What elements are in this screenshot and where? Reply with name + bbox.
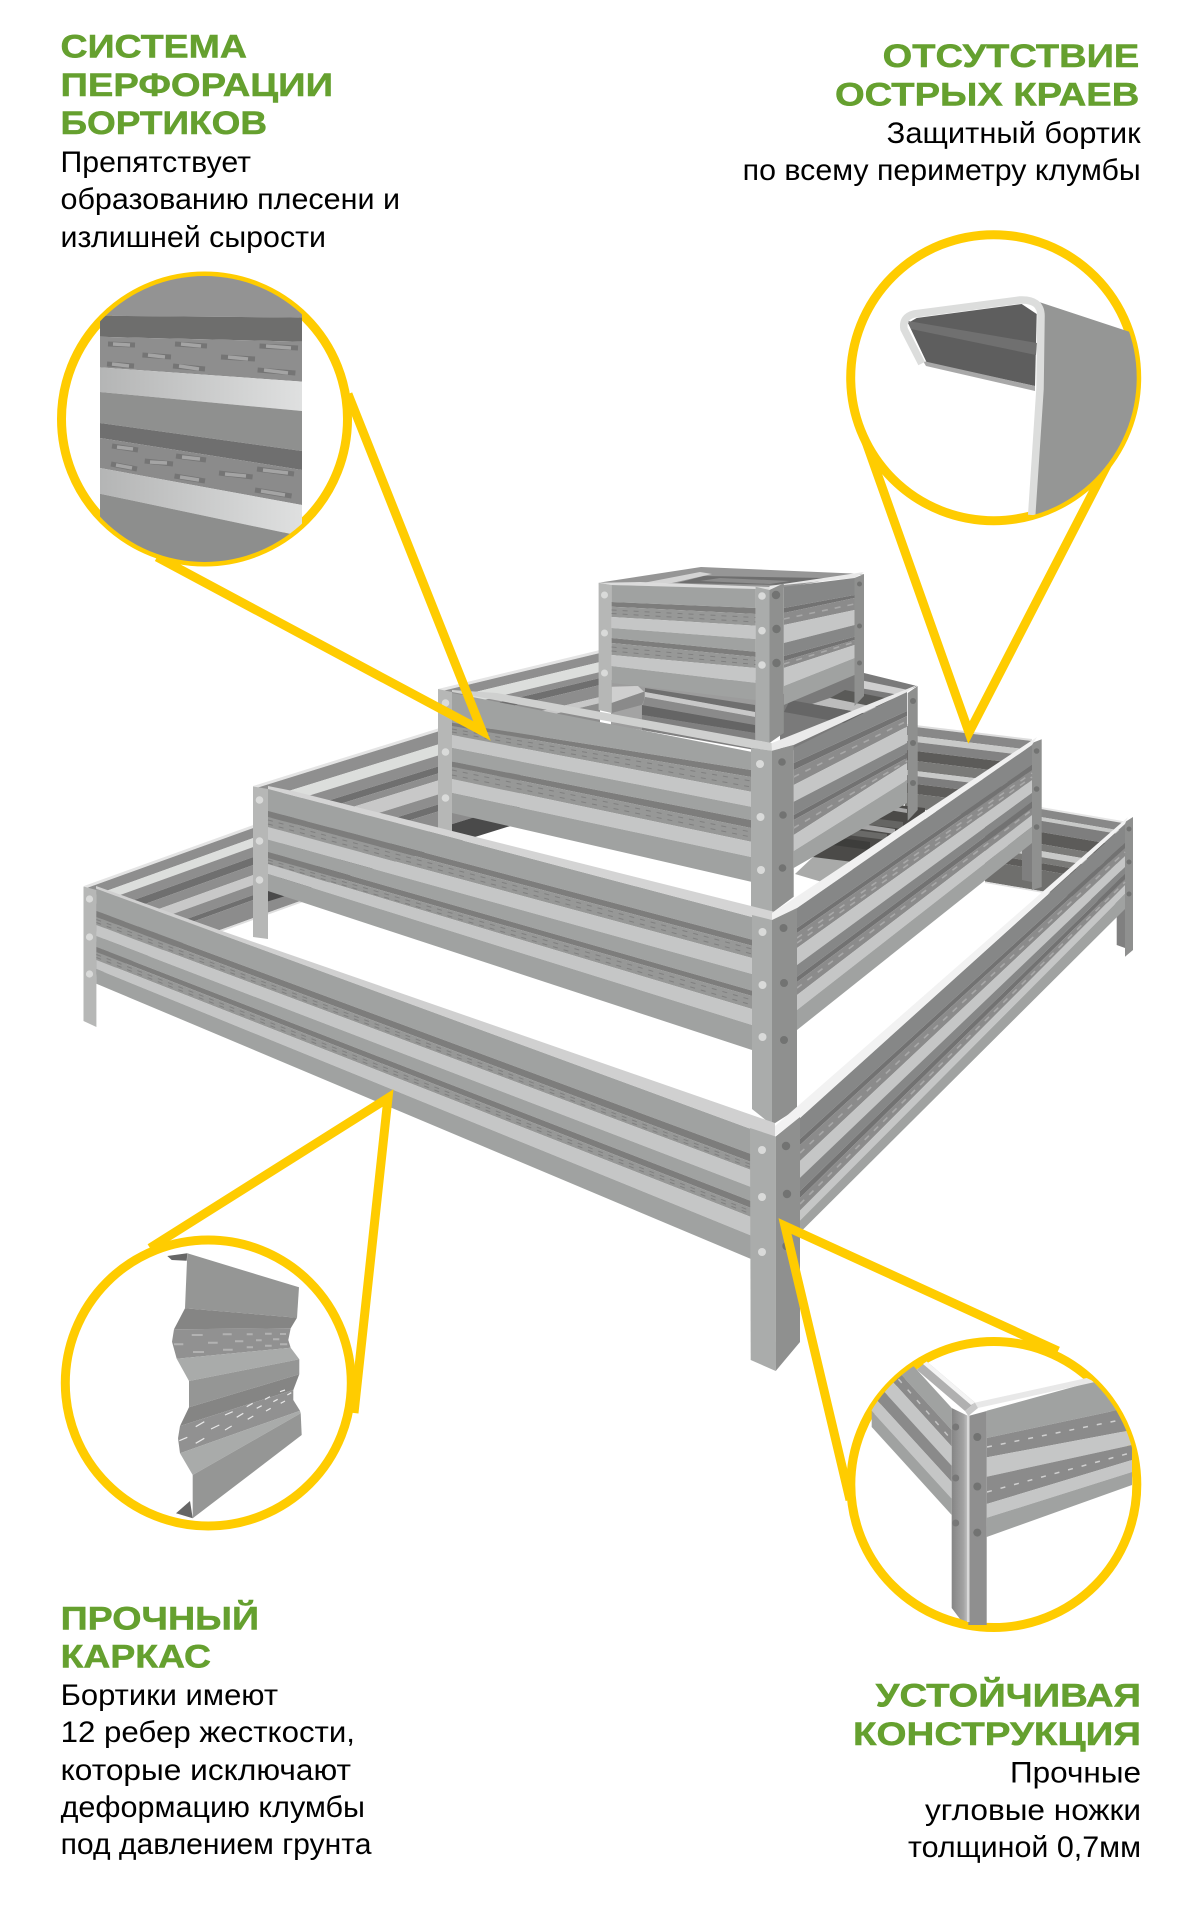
text block: stable construction bbox=[853, 1678, 1141, 1864]
text block: rigid frame: деформацию клумбы bbox=[61, 1791, 365, 1824]
lower inner zone under tier 3 bbox=[795, 803, 925, 882]
text block: no sharp edges bbox=[743, 38, 1142, 187]
inset circle: profile with stiffening ribs bbox=[65, 1240, 351, 1526]
text block: rigid frame: которые исключают bbox=[61, 1754, 351, 1787]
text block: rigid frame: 12 ребер жесткости, bbox=[61, 1716, 355, 1749]
tier 4 front corner post bbox=[756, 583, 784, 743]
tier 2 left wall bbox=[268, 786, 775, 1050]
text block: rigid frame: КАРКАС bbox=[61, 1639, 211, 1675]
tier 2 front corner post bbox=[752, 908, 797, 1125]
tier 1 left wall bbox=[96, 886, 775, 1259]
callout pointer: safe edge bbox=[860, 425, 1120, 732]
text block: rigid frame bbox=[61, 1600, 372, 1861]
callout pointer: perforation bbox=[157, 394, 482, 731]
text block: perforation system: ПЕРФОРАЦИИ bbox=[60, 67, 333, 103]
tier 3 left wall bbox=[452, 690, 772, 882]
inset circle: corner leg detail bbox=[851, 1320, 1137, 1628]
callout pointer: rigid frame bbox=[150, 1098, 388, 1413]
inset circle: rolled edge detail bbox=[851, 235, 1145, 521]
tier 1 front bbox=[84, 817, 1133, 1371]
tier 4 top box bbox=[599, 567, 864, 743]
callout pointer: corner legs bbox=[785, 1226, 1058, 1500]
text block: rigid frame: под давлением грунта bbox=[61, 1828, 372, 1861]
tier 1 front corner post bbox=[750, 1117, 800, 1371]
text block: stable construction: толщиной 0,7мм bbox=[908, 1831, 1141, 1864]
text block: perforation system: БОРТИКОВ bbox=[60, 105, 267, 141]
tier 1 back walls bbox=[84, 798, 1130, 981]
text block: stable construction: УСТОЙЧИВАЯ bbox=[876, 1678, 1141, 1714]
text block: no sharp edges: ОТСУТСТВИЕ bbox=[883, 38, 1139, 74]
text block: stable construction: Прочные bbox=[1010, 1757, 1141, 1790]
text block: rigid frame: ПРОЧНЫЙ bbox=[61, 1600, 259, 1636]
text block: perforation system: излишней сырости bbox=[60, 221, 326, 254]
tier 2 back walls bbox=[253, 703, 1032, 906]
tier 2 right wall bbox=[772, 737, 1037, 1030]
text block: perforation system: Препятствует bbox=[60, 146, 251, 179]
text block: perforation system: образованию плесени и bbox=[60, 183, 400, 216]
text block: no sharp edges: Защитный бортик bbox=[887, 117, 1142, 150]
text block: no sharp edges: ОСТРЫХ КРАЕВ bbox=[835, 77, 1139, 113]
top opening bbox=[599, 567, 864, 590]
text block: stable construction: угловые ножки bbox=[925, 1794, 1141, 1827]
tier 2 front bbox=[253, 737, 1042, 1125]
tier 3 right wall bbox=[772, 685, 917, 868]
text block: no sharp edges: по всему периметру клумбы bbox=[743, 154, 1141, 187]
tier 4 right wall bbox=[784, 578, 854, 705]
tier 3 far posts bbox=[438, 686, 918, 832]
tier 2 far posts bbox=[253, 739, 1042, 939]
text block: perforation system bbox=[60, 28, 400, 254]
inset circle: perforation detail bbox=[62, 270, 348, 565]
tier 4 left wall bbox=[612, 585, 756, 700]
text block: rigid frame: Бортики имеют bbox=[61, 1679, 278, 1712]
text block: stable construction: КОНСТРУКЦИЯ bbox=[853, 1716, 1141, 1752]
tier 3 front corner post bbox=[751, 745, 794, 913]
tier 1 right wall bbox=[775, 817, 1128, 1232]
illustration: tiered metal flower bed bbox=[84, 567, 1133, 1371]
tier 4 far posts bbox=[599, 574, 864, 713]
tier 3 back walls bbox=[438, 650, 917, 761]
tier 3 front bbox=[438, 685, 918, 913]
text block: perforation system: СИСТЕМА bbox=[60, 28, 247, 64]
tier 1 far posts bbox=[84, 817, 1133, 1027]
